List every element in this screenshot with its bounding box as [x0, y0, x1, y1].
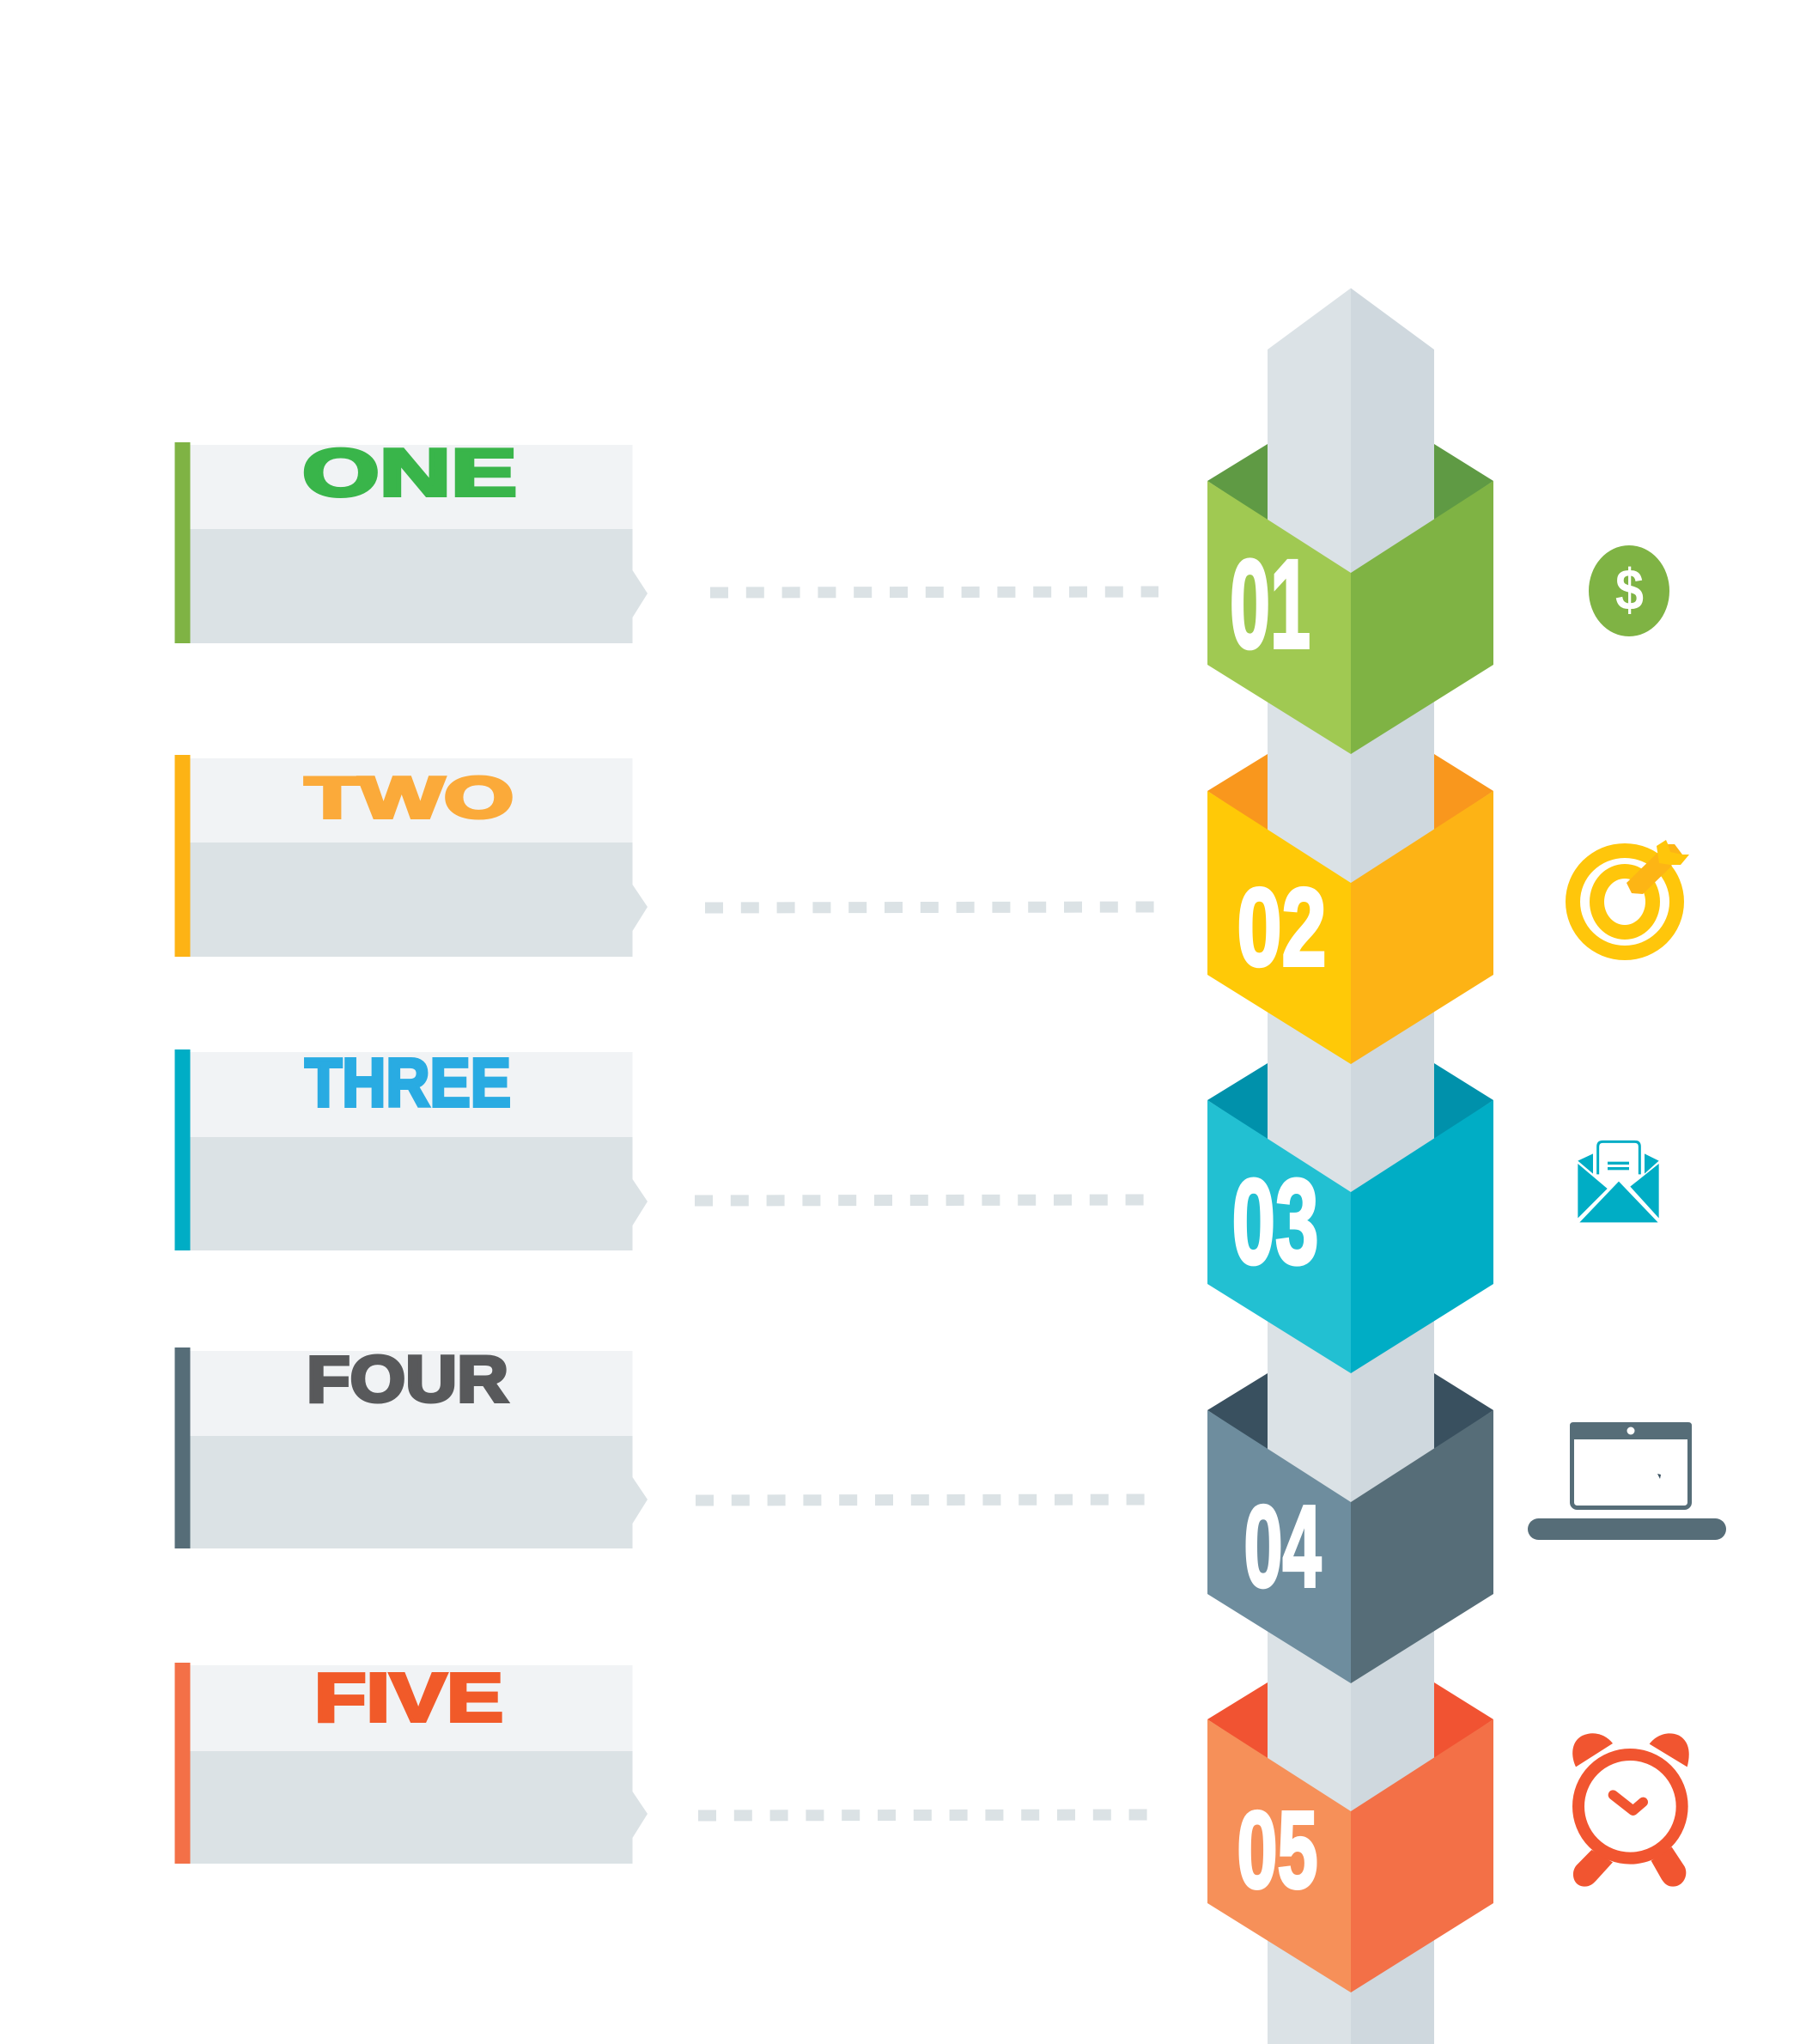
dotted connector two	[705, 907, 1154, 908]
icon: alarm clock	[1572, 1733, 1689, 1887]
number 04: 04	[1243, 1481, 1321, 1611]
central column	[1268, 289, 1434, 2044]
icon: dollar coin: $	[1615, 557, 1644, 623]
number 05: 05	[1237, 1789, 1317, 1911]
heading: four: FOUR	[307, 1343, 508, 1416]
number 03: 03	[1231, 1153, 1319, 1289]
number 01: 01	[1230, 534, 1310, 675]
dotted connector one	[710, 592, 1158, 593]
panel: four	[175, 1343, 648, 1548]
heading: two: TWO	[305, 765, 514, 830]
icon: dollar coin	[1589, 545, 1669, 636]
cube 04	[1207, 1373, 1493, 1683]
number 02: 02	[1237, 866, 1326, 989]
cube 01	[1207, 444, 1493, 754]
cube 05	[1207, 1682, 1493, 1992]
cube 02	[1207, 754, 1493, 1064]
panel: two	[175, 755, 648, 957]
icon: target with dart	[1566, 840, 1689, 960]
panel: three	[175, 1044, 648, 1250]
heading: three: THREE	[305, 1044, 511, 1121]
cube 03	[1207, 1063, 1493, 1373]
dotted connector five	[698, 1815, 1147, 1816]
heading: five: FIVE	[314, 1659, 503, 1736]
panel: one	[175, 435, 648, 643]
panel: five	[175, 1659, 648, 1864]
heading: one: ONE	[302, 435, 517, 510]
dotted connector three	[695, 1200, 1144, 1201]
icon: envelope	[1578, 1141, 1659, 1222]
icon: laptop	[1528, 1422, 1726, 1540]
